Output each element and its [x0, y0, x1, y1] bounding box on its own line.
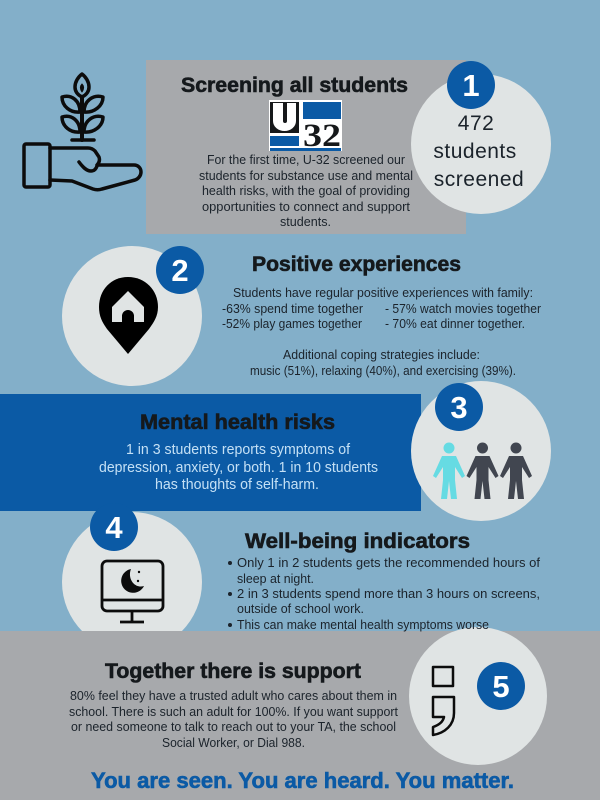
text block: mental health description: 1 in 3 students reports symptoms of	[126, 442, 351, 458]
circle: people icon	[411, 381, 551, 521]
text block: screening description: students for substance use and mental	[199, 168, 413, 183]
stat: 472 students screened: screened	[434, 168, 524, 191]
icon: semicolon	[433, 667, 454, 735]
text block: positive experiences statistics: - 57% watch movies together	[385, 301, 542, 316]
text block: screening description	[199, 152, 413, 229]
text block: positive experiences statistics: Additional coping strategies include:	[283, 347, 480, 362]
icon: monitor with moon	[102, 561, 163, 622]
badge: 3: 3	[450, 390, 468, 425]
text block: mental health description: has thoughts of self-harm.	[155, 477, 319, 493]
text block: screening description: opportunities to connect and support	[202, 199, 410, 214]
text block: positive experiences statistics: - 70% eat dinner together.	[385, 316, 525, 331]
logo: U-32	[269, 100, 342, 154]
text block: positive experiences statistics: Students have regular positive experiences with family:	[233, 285, 533, 300]
circle: home pin icon	[62, 246, 204, 386]
badge: 2	[156, 246, 204, 294]
text block: support description: or need someone to talk to reach out to your TA, the school	[71, 719, 396, 734]
heading: together there is support: Together there is support	[105, 660, 361, 683]
text block: screening description: students.	[280, 214, 331, 229]
list: well-being indicators: sleep at night.	[237, 571, 314, 586]
badge: 5: 5	[492, 669, 510, 704]
text block: positive experiences statistics: music (51%), relaxing (40%), and exercising (39%).	[250, 363, 516, 378]
list: well-being indicators	[228, 555, 540, 632]
text block: support description	[69, 688, 398, 750]
icon: location pin with house	[99, 277, 158, 354]
icon: hand holding plant	[24, 74, 141, 190]
list: well-being indicators: 2 in 3 students spend more than 3 hours on screens,	[237, 586, 540, 601]
stat: 472 students screened: 472	[458, 112, 494, 135]
circle: semicolon icon	[409, 627, 547, 765]
panel: together there is support	[0, 631, 600, 800]
badge: 4: 4	[105, 510, 123, 545]
heading: positive experiences: Positive experiences	[252, 253, 461, 276]
heading: well-being indicators: Well-being indicators	[245, 530, 470, 553]
list: well-being indicators: Only 1 in 2 students gets the recommended hours of	[237, 555, 540, 570]
badge: 4	[90, 503, 138, 551]
panel: screening all students	[146, 60, 466, 234]
icon: dark person	[500, 442, 532, 499]
heading: screening all students: Screening all students	[181, 74, 408, 97]
text block: screening description: For the first time, U-32 screened our	[207, 152, 406, 167]
text block: positive experiences statistics: -63% spend time together	[222, 301, 364, 316]
text block: mental health description: depression, anxiety, or both. 1 in 10 students	[99, 460, 378, 476]
badge: 1: 1	[462, 68, 480, 103]
circle: monitor icon	[62, 503, 202, 652]
icon: dark person	[466, 442, 498, 499]
circle: students screened	[411, 61, 551, 214]
logo: U-32: 32	[303, 118, 341, 154]
icon: one teal person	[433, 442, 465, 499]
panel: mental health risks	[0, 394, 421, 511]
text block: screening description: health risks, with the goal of providing	[202, 183, 410, 198]
text block: support description: school. There is such an adult for 100%. If you want support	[69, 704, 398, 719]
list: well-being indicators: This can make mental health symptoms worse	[237, 617, 489, 632]
text block: mental health description	[99, 442, 378, 493]
text block: support description: Social Worker, or Dial 988.	[162, 735, 305, 750]
tagline: You are seen. You are heard. You matter.	[91, 768, 514, 793]
text block: positive experiences statistics	[222, 285, 542, 378]
badge: 1	[447, 61, 495, 109]
stat: 472 students screened: students	[433, 140, 517, 163]
list: well-being indicators: outside of school work.	[237, 601, 364, 616]
badge: 2: 2	[171, 253, 189, 288]
heading: mental health risks: Mental health risks	[140, 411, 335, 434]
text block: support description: 80% feel they have a trusted adult who cares about them in	[70, 688, 397, 703]
text block: positive experiences statistics: -52% play games together	[222, 316, 363, 331]
